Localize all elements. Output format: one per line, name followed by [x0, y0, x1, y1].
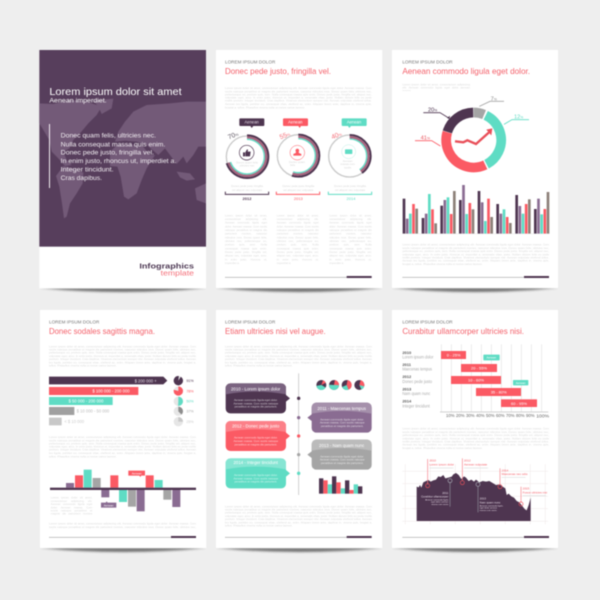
text column 1: Lorem ipsum dolor sit amet, consectetuer adipiscing elit. Aenean commodo ligula eget dolor. Aenean massa. Cum sociis natoque penatibus et magnis dis parturient montes, nascetur ridiculus mus. Donec quam felis, ultricies nec, pellentesque eu, pretium quis, sem. Nulla consequat massa quis enim. Donec pede justo, fringilla vel, aliquet nec, vulputate eget, arcu. In enim justo, rhoncus ut, imperdiet a. [225, 214, 267, 265]
bar: $50 000 - 200 000 [49, 397, 113, 405]
callout: 7% [479, 96, 504, 106]
pin: 2013: massa cum sociis [480, 510, 497, 512]
donut captions: Donec pede justo fringilla [282, 184, 315, 188]
pin: 2011: Aenean commodo ligula [425, 498, 449, 501]
pin: 2015 [519, 487, 547, 506]
gantt row labels: 2014 [402, 399, 412, 404]
panel: cover [39, 50, 206, 288]
panel: pie and bars page [392, 50, 558, 288]
pin: 2014: 2014 [502, 468, 509, 472]
pin: 2011: 2011 [442, 491, 449, 495]
callout: 12% [504, 115, 529, 124]
pin: 2013: 2013 [480, 497, 486, 501]
gantt axis labels: 40% [476, 413, 485, 418]
heading: Donec sodales sagittis magna. [49, 326, 155, 336]
callout: 7%: 7% [491, 96, 497, 102]
area chart [417, 473, 531, 521]
donut captions: massa cum [340, 162, 356, 166]
gantt row labels: 2011 [402, 362, 412, 367]
tooltip: 2014: Aenean [347, 120, 362, 125]
pie: 91% [174, 376, 194, 385]
pin: 2014 [498, 468, 528, 489]
donut captions: sociis [344, 165, 352, 169]
footer bar [402, 536, 549, 538]
gantt tooltip: Aenean [486, 356, 497, 360]
bar: $10 000 - 50 000: $ 10 000 - 50 000 [77, 409, 110, 414]
cover title: Lorem ipsum dolor sit amet [49, 87, 182, 98]
panel: donuts page [216, 50, 382, 288]
cover accent line [48, 124, 51, 188]
cover text block: Cras dapibus. [61, 175, 102, 182]
footer bar [225, 276, 372, 278]
gantt row labels: 2012 [402, 374, 412, 379]
card: 2014: 2014 - Integer tincidunt [234, 460, 279, 465]
pin: 2013 [476, 482, 504, 512]
donut chart [437, 103, 510, 177]
donut: 40%: 40% [330, 130, 344, 141]
card: 2011: 2011 - Maecenas tempus [317, 406, 366, 411]
area chart grid [402, 464, 548, 524]
heading: Donec pede justo, fringilla vel. [225, 66, 331, 76]
header: LOREM IPSUM DOLOR [402, 59, 453, 64]
panel: horizontal bars page [40, 310, 206, 548]
tooltip: 2014 [342, 118, 367, 128]
donut captions: ultricies nec [240, 163, 255, 167]
donut: 55%: 55% [279, 130, 292, 141]
header: LOREM IPSUM DOLOR [49, 319, 100, 324]
card: 2013: Aenean commodo ligula eget dolor. Aenean massa. Cum sociis natoque penatibus et magnis dis parturient. [320, 455, 365, 465]
card: 2013: 2013 - Nam quam nunc [319, 443, 365, 448]
gantt axis labels: 30% [466, 413, 475, 418]
pin: 2013: eget dolor aenean [480, 507, 498, 510]
heading: Etiam ultricies nisi vel augue. [225, 326, 326, 336]
gantt axis labels [446, 413, 550, 419]
gantt axis labels: 60% [496, 413, 505, 418]
chart tooltip: mauve [101, 501, 116, 508]
donut: 40% [329, 130, 371, 177]
pin: 2011: Curabitur ullamcorper [421, 495, 448, 499]
chart tooltip: coral: Aenean [132, 471, 142, 475]
donut captions: Donec pede justo fringilla [231, 184, 263, 188]
donut captions: Donec quam felis [236, 160, 259, 164]
intro text: Lorem ipsum dolor sit amet, consectetuer adipiscing elit. Aenean commodo ligula eget dolor. Aenean massa. Cum sociis natoque penatibus et magnis dis parturient montes, nascetur ridiculus mus. Donec quam felis, ultricies nec, pellentesque eu, pretium quis, sem. Nulla consequat massa quis enim. Donec pede justo, fringilla vel, aliquet nec, vulputate eget, arcu. In enim justo, rhoncus ut, imperdiet a, venenatis vitae, justo. Nullam dictum felis eu pede mollis pretium. Integer tincidunt. Cras dapibus. Vivamus elementum semper nisi. Aenean vulputate eleifend tellus. Aenean leo ligula, porttitor eu, consequat vitae, eleifend ac, enim. Aliquam lorem ante, dapibus in, viverra quis, feugiat a, tellus. Phasellus viverra nulla ut metus varius laoreet. [225, 87, 372, 109]
gantt axis labels: 10% [446, 413, 455, 418]
gantt row labels: 2010 [402, 350, 412, 355]
pin: 2012: Aenean vulputate [464, 463, 488, 467]
callout: 41% [415, 136, 440, 146]
pin: 2012: 2012 [464, 459, 471, 463]
chart tooltip: mauve: Aenean [104, 503, 114, 507]
gantt tooltip: Aenean [516, 381, 526, 385]
callout: 20% [423, 108, 450, 119]
year bracket: 2013 [276, 192, 320, 201]
donut captions [231, 159, 366, 192]
gantt bars: 10 - 60% [468, 378, 484, 383]
body text: Lorem ipsum dolor sit amet, consectetuer adipiscing elit. Aenean commodo ligula eget dolor. Aenean massa. Cum sociis natoque penatibus et magnis dis parturient montes, nascetur ridiculus mus. Donec quam felis, ultricies nec, pellentesque eu, pretium quis, sem. Nulla consequat massa quis enim. Donec pede justo, fringilla vel, aliquet nec, vulputate eget, arcu. In enim justo, rhoncus ut, imperdiet a, venenatis vitae, justo. Nullam dictum felis eu pede mollis pretium. Integer tincidunt. Cras dapibus. Vivamus elementum semper nisi. Aenean vulputate eleifend tellus. Aenean leo ligula, porttitor eu, consequat vitae, eleifend ac, enim. Aliquam lorem ante, dapibus in, viverra quis, feugiat a, tellus. Phasellus viverra nulla ut metus varius laoreet. [402, 243, 549, 265]
card: 2012: Aenean commodo ligula eget dolor. Aenean massa. Cum sociis natoque penatibus et magnis dis parturient. [233, 436, 278, 446]
gantt axis labels: 80% [516, 413, 525, 418]
page shadows [40, 288, 558, 552]
text column 2: Lorem ipsum dolor sit amet, consectetuer adipiscing elit. Aenean commodo ligula eget dolor. Aenean massa. Cum sociis natoque penatibus et magnis dis parturient montes, nascetur ridiculus mus. Donec quam felis, ultricies nec, pellentesque eu, pretium quis, sem. Nulla consequat massa quis enim. Donec pede justo, fringilla vel, aliquet nec, vulputate eget, arcu. In enim justo, rhoncus ut, imperdiet a. [277, 214, 319, 265]
pin: 2010 [426, 459, 454, 488]
cover text block: Integer tincidunt. [61, 167, 114, 174]
donut: 70%: 70% [227, 130, 240, 141]
intro text: Lorem ipsum dolor sit amet, consectetuer adipiscing elit. Aenean commodo ligula eget dolor. Aenean massa. Cum sociis natoque penatibus et magnis dis parturient montes, nascetur ridiculus mus. Donec quam felis, ultricies nec, pellentesque eu, pretium quis, sem. Nulla consequat massa quis enim. Donec pede justo, fringilla vel, aliquet nec, vulputate eget, arcu. In enim justo, rhoncus ut, imperdiet a, venenatis vitae, justo. Nullam dictum felis eu pede mollis pretium. Integer tincidunt. Cras dapibus. Vivamus elementum semper nisi. Aenean vulputate eleifend tellus. Aenean leo ligula, porttitor eu, consequat vitae, eleifend ac, enim. Aliquam lorem ante, dapibus in, viverra quis, feugiat a, tellus. Phasellus viverra nulla ut metus varius laoreet. [225, 345, 372, 367]
pin: 2015: 2015 [523, 487, 530, 491]
gantt bars: 20 - 55% [471, 366, 487, 371]
callout: 12%: 12% [514, 115, 523, 121]
world map [39, 99, 206, 218]
pin: 2013: Aenean commodo ligula [480, 504, 504, 507]
cover text block: In enim justo, rhoncus ut, imperdiet a. [61, 158, 177, 165]
gantt axis labels: 50% [486, 413, 495, 418]
intro text: Lorem ipsum dolor sit amet, consectetuer adipiscing elit. Aenean commodo ligula eget dolor. Aenean massa. Cum sociis natoque penatibus et magnis dis parturient montes, nascetur ridiculus mus. Donec quam felis, ultricies nec, pellentesque eu, pretium quis, sem. Nulla consequat massa quis enim. Donec pede justo, fringilla vel, aliquet nec, vulputate eget, arcu. In enim justo, rhoncus ut, imperdiet a, venenatis vitae, justo. Nullam dictum felis eu pede mollis pretium. Integer tincidunt. Cras dapibus. Vivamus elementum semper nisi. Aenean vulputate eleifend tellus. Aenean leo ligula, porttitor eu, consequat vitae, eleifend ac, enim. Aliquam lorem ante, dapibus in, viverra quis, feugiat a, tellus. Phasellus viverra nulla ut metus varius laoreet. [49, 345, 196, 367]
donut: 70% [226, 130, 268, 178]
bar: $50 000 - 200 000: $ 50 000 - 200 000 [69, 399, 104, 404]
gantt bars: 0 - 25% [447, 353, 461, 358]
card: 2010: Aenean commodo ligula eget dolor. Aenean massa. Cum sociis natoque penatibus et magnis dis parturient. [233, 398, 278, 408]
card: 2013 [307, 440, 372, 470]
gantt row labels: Maecenas tempus [402, 367, 432, 372]
year bracket: 2012 [225, 192, 269, 201]
tooltip: 2013: Aenean [288, 120, 303, 125]
gantt row labels [402, 350, 434, 408]
panel: timeline page [216, 310, 382, 548]
brand mark [139, 261, 194, 278]
pie: 50%: 50% [186, 400, 194, 404]
donut captions: vel aliquet nec vulputate [283, 188, 314, 192]
pie: 78%: 78% [186, 389, 194, 393]
gantt tooltip [483, 355, 500, 360]
bar: $200 000+ [49, 377, 167, 384]
donut captions: vel aliquet nec vulputate [335, 188, 366, 192]
heading: Aenean commodo ligula eget dolor. [402, 66, 530, 76]
tooltip: 2012 [239, 118, 264, 128]
pie: 25%: 25% [186, 420, 194, 424]
year bracket: 2014 [328, 192, 372, 201]
middle text: Lorem ipsum dolor sit amet, consectetuer adipiscing elit. Aenean commodo ligula eget dolor. Aenean massa. Cum sociis natoque penatibus et magnis dis parturient montes, nascetur ridiculus mus. Donec quam felis, ultricies nec, pellentesque eu, pretium quis, sem. Nulla consequat massa quis enim. Donec pede justo, fringilla vel, aliquet nec, vulputate eget, arcu. In enim justo, rhoncus ut, imperdiet a, venenatis vitae, justo. Nullam dictum felis eu pede mollis pretium. Integer tincidunt. Cras dapibus. Vivamus elementum semper nisi. Aenean vulputate eleifend tellus. Aenean leo ligula, porttitor eu, consequat vitae, eleifend ac, enim. Aliquam lorem ante, dapibus in, viverra quis, feugiat a, tellus. Phasellus viverra nulla ut metus varius laoreet. [49, 436, 196, 458]
pin: 2011: massa cum sociis [431, 504, 448, 506]
pin: 2011 [421, 479, 452, 507]
chart tooltip: coral [128, 471, 145, 477]
donut captions: felis [290, 163, 296, 167]
cover text block: Nulla consequat massa quis enim. [61, 141, 166, 148]
header: LOREM IPSUM DOLOR [402, 319, 453, 324]
year bracket: 2012: 2012 [243, 196, 252, 201]
card: 2010 [226, 383, 290, 413]
brand mark: template [161, 269, 194, 278]
gantt row labels: Nam quam nunc [402, 391, 431, 396]
tooltip: 2013 [283, 118, 308, 128]
tooltip: 2012: Aenean [244, 120, 260, 125]
pie: 91%: 91% [186, 379, 194, 383]
gantt bars: 35 - 80% [491, 390, 507, 395]
middle text: Lorem ipsum dolor sit amet, consectetuer adipiscing elit. Aenean commodo ligula eget dolor. Aenean massa. Cum sociis natoque penatibus et magnis dis parturient montes, nascetur ridiculus mus. Donec quam felis, ultricies nec, pellentesque eu, pretium quis, sem. Nulla consequat massa quis enim. Donec pede justo, fringilla vel, aliquet nec, vulputate eget, arcu. In enim justo, rhoncus ut, imperdiet a, venenatis vitae, justo. Nullam dictum felis eu pede mollis pretium. Integer tincidunt. Cras dapibus. Vivamus elementum semper nisi. Aenean vulputate eleifend tellus. Aenean leo ligula, porttitor eu, consequat vitae, eleifend ac, enim. Aliquam lorem ante, dapibus in, viverra quis, feugiat a, tellus. Phasellus viverra nulla ut metus varius laoreet. [402, 427, 549, 449]
footer bar [402, 276, 549, 278]
cover text block: Donec pede justo, fringilla vel. [61, 150, 154, 157]
donut captions: Donec pede justo fringilla [334, 184, 366, 188]
grouped bar chart [402, 185, 549, 234]
gantt row labels: 2013 [402, 386, 412, 391]
cover text block: Donec quam felis, ultricies nec. [61, 133, 156, 140]
pin: 2011: eget dolor aenean [431, 501, 449, 504]
header: LOREM IPSUM DOLOR [225, 319, 276, 324]
header: LOREM IPSUM DOLOR [225, 59, 276, 64]
card: 2014: Aenean commodo ligula eget dolor. Aenean massa. Cum sociis natoque penatibus et magnis dis parturient. [233, 473, 278, 483]
year bracket: 2013: 2013 [294, 196, 304, 201]
panel: gantt and area page [392, 310, 558, 548]
pie: 50% [174, 397, 194, 406]
pin: 2013: Nam quam nunc [480, 501, 501, 505]
pie: 25% [174, 417, 194, 426]
cover subtitle: Aenean imperdiet. [49, 98, 107, 105]
bar: $100 000 - 200 000 [49, 387, 138, 395]
gantt axis labels: 100% [536, 413, 550, 419]
gantt bars: 60 - 95% [511, 401, 527, 406]
text column 3: Lorem ipsum dolor sit amet, consectetuer adipiscing elit. Aenean commodo ligula eget dolor. Aenean massa. Cum sociis natoque penatibus et magnis dis parturient montes, nascetur ridiculus mus. Donec quam felis, ultricies nec, pellentesque eu, pretium quis, sem. Nulla consequat massa quis enim. Donec pede justo, fringilla vel, aliquet nec, vulputate eget, arcu. In enim justo, rhoncus ut, imperdiet a. [329, 214, 372, 265]
card: 2010: 2010 - Lorem ipsum dolor [231, 386, 281, 391]
body text: Lorem ipsum dolor sit amet, consectetuer adipiscing elit. Aenean commodo ligula eget dolor. Aenean massa. Cum sociis natoque penatibus et magnis dis parturient montes, nascetur ridiculus mus. Donec quam felis, ultricies nec, pellentesque eu, pretium quis, sem. Nulla consequat massa quis enim. Donec pede justo, fringilla vel, aliquet nec, vulputate eget, arcu. In enim justo, rhoncus ut, imperdiet a, venenatis vitae, justo. Nullam dictum felis eu pede mollis pretium. Integer tincidunt. Cras dapibus. Vivamus elementum semper nisi. Aenean vulputate eleifend tellus. Aenean leo ligula, porttitor eu, consequat vitae, eleifend ac, enim. Aliquam lorem ante, dapibus in, viverra quis, feugiat a, tellus. Phasellus viverra nulla ut metus varius laoreet. [225, 505, 372, 527]
pin: 2010: Lorem ipsum dolor [429, 463, 454, 467]
gantt row labels: Lorem ipsum dolor [402, 355, 434, 360]
donut captions: Donec quam [289, 160, 306, 164]
card: 2012 [226, 421, 290, 451]
pie: 37%: 37% [186, 410, 194, 414]
bar: under $10 000: < $ 10 000 [64, 419, 85, 424]
bar: $100 000 - 200 000: $ 100 000 - 200 000 [92, 389, 130, 394]
gantt axis labels: 20% [456, 413, 465, 418]
pie: 78% [174, 386, 194, 396]
donut captions: Aenean [343, 159, 353, 163]
pin: 2014: Maecenas nec odio [502, 472, 528, 476]
trend arrow [455, 128, 492, 144]
donut: 55% [277, 130, 319, 177]
heading: Curabitur ullamcorper ultricies nisi. [402, 326, 524, 336]
cover text block [61, 133, 177, 182]
mini pies [318, 382, 362, 388]
bar: $200 000+: $ 200 000 + [135, 378, 157, 383]
bar: $10 000 - 50 000 [49, 407, 110, 415]
gantt axis labels: 70% [506, 413, 515, 418]
diverging bar chart [50, 470, 196, 511]
gantt tooltip [513, 380, 528, 385]
card: 2011 [307, 403, 372, 433]
pin: 2015: Fusce ultricies nisi [523, 490, 547, 494]
gantt row labels: Integer tincidunt [402, 403, 430, 408]
gantt axis labels: 90% [526, 413, 535, 418]
bar: under $10 000 [49, 418, 85, 425]
callout: 41%: 41% [421, 136, 430, 142]
gantt bars [441, 351, 537, 407]
timeline axis and dots [297, 373, 300, 495]
footer bar [225, 536, 372, 538]
card: 2014 [226, 458, 290, 488]
pie: 37% [174, 407, 194, 416]
brand mark: Infographics [139, 261, 194, 270]
pin: 2010: 2010 [429, 459, 436, 463]
footer bar [49, 536, 196, 538]
year bracket: 2014: 2014 [347, 196, 356, 201]
gantt row labels: Donec pede justo [402, 379, 433, 384]
gantt grid [440, 344, 548, 412]
pin: 2012 [460, 458, 488, 485]
card: 2012: 2012 - Donec pede justo [232, 423, 280, 428]
callout: 20%: 20% [428, 108, 437, 114]
card: 2011: Aenean commodo ligula eget dolor. Aenean massa. Cum sociis natoque penatibus et magnis dis parturient. [320, 418, 365, 428]
mini bar chart [319, 476, 362, 494]
donut captions: vel aliquet nec vulputate [232, 188, 263, 192]
